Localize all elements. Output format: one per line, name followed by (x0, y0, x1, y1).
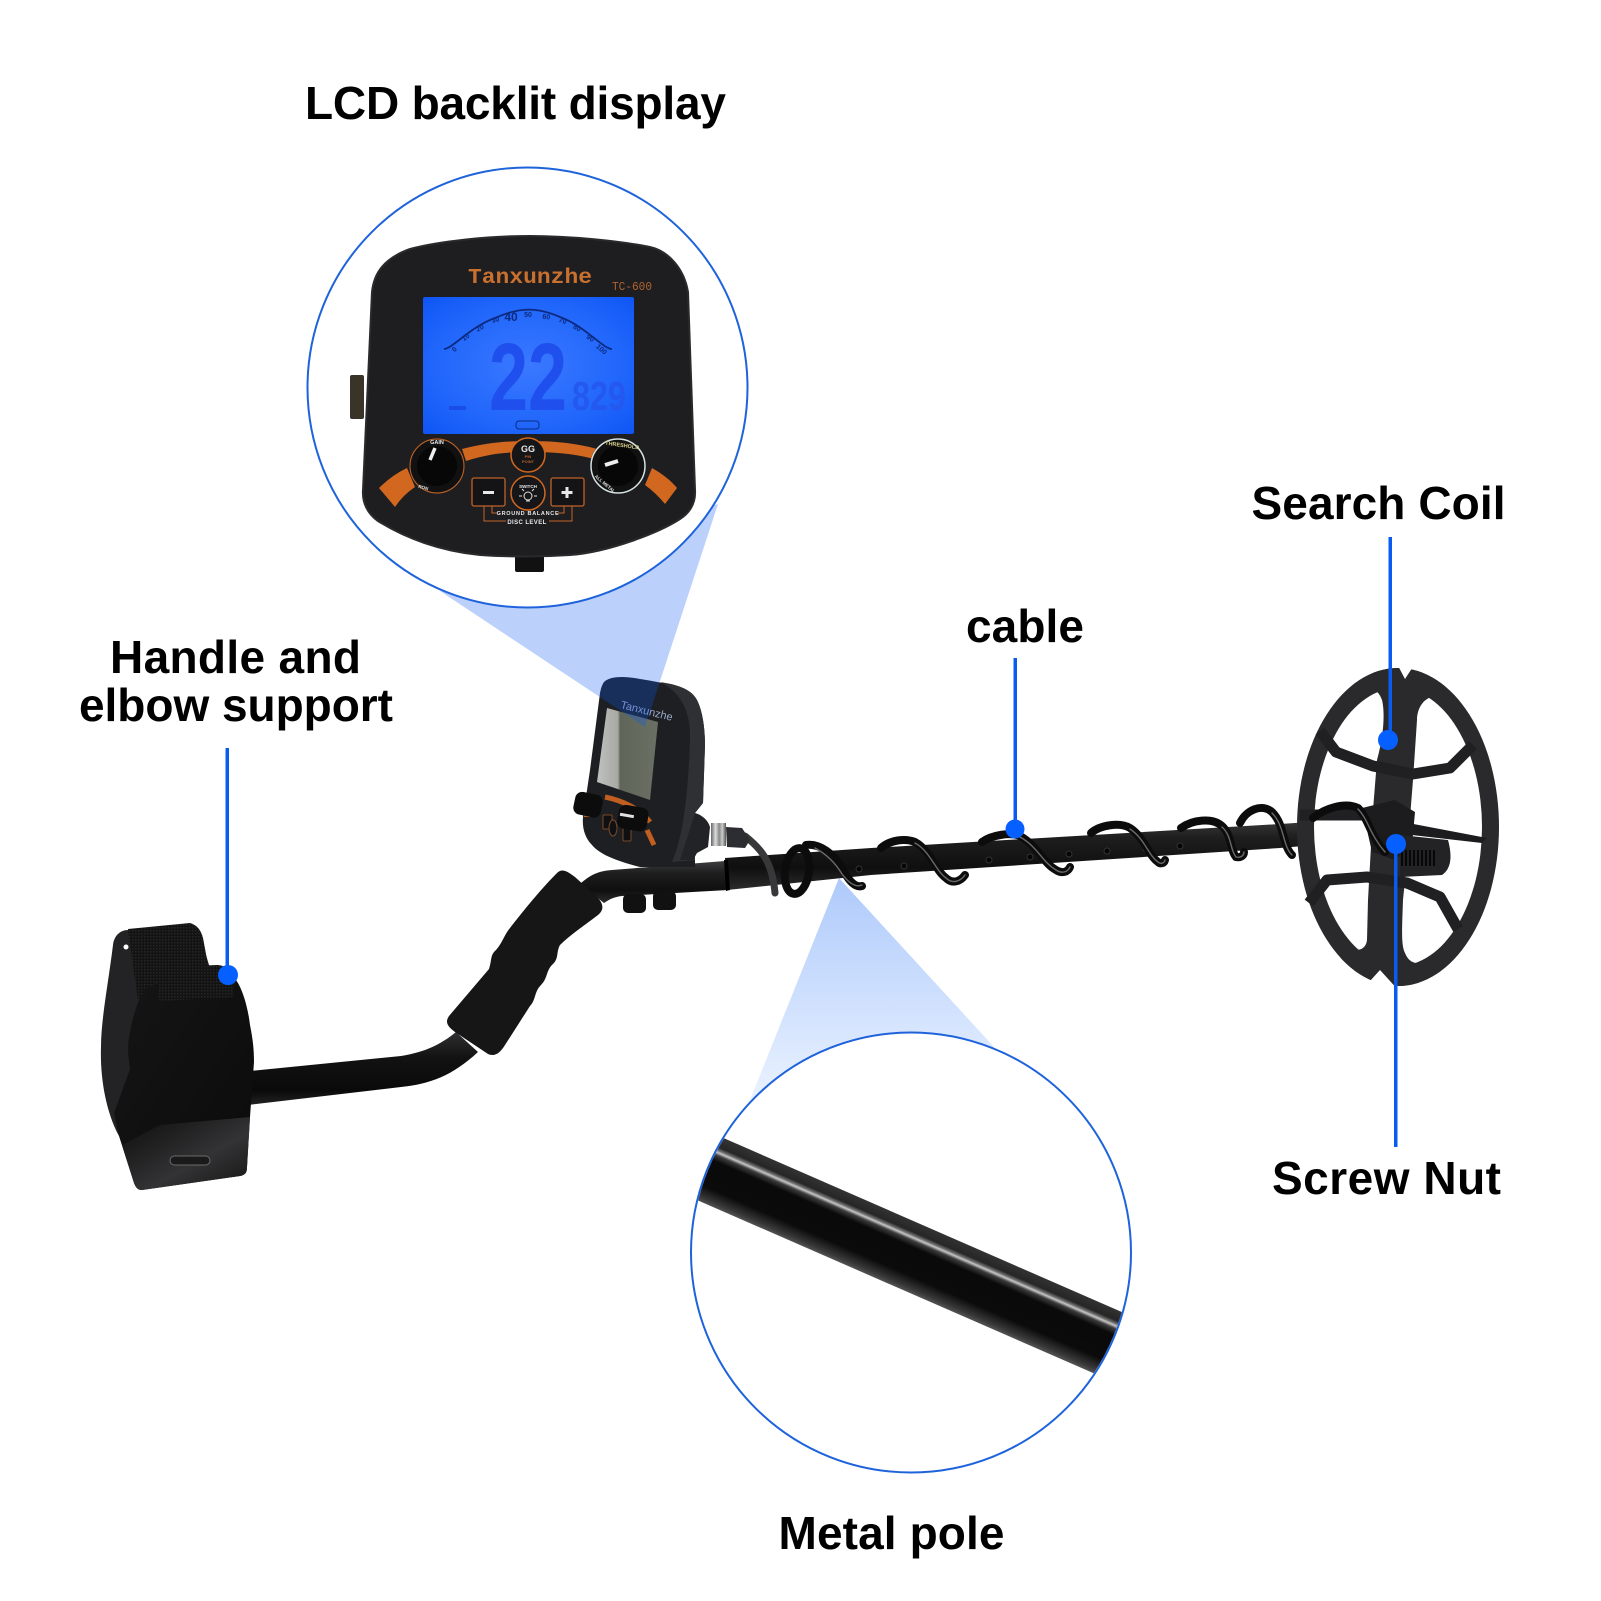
heading: Screw Nut: Screw Nut (1272, 1152, 1501, 1204)
coil opening (1314, 688, 1482, 966)
scale numbers: 90 (585, 334, 595, 344)
plate slot (170, 1156, 210, 1165)
cable socket (680, 813, 710, 860)
highlight wedge: metal pole (750, 878, 994, 1100)
pole bracket (1362, 800, 1415, 860)
model text: TC-600 (612, 280, 652, 294)
heading: Handle and elbow support: elbow support (79, 679, 393, 731)
heading: cable: cable (966, 600, 1084, 652)
ground balance label: GROUND BALANCE (497, 511, 559, 517)
main digits: 22 (489, 324, 567, 431)
THRESHOLD knob: ALL METAL (594, 474, 616, 494)
scale numbers: 80 (572, 324, 582, 334)
heading: Search Coil: Search Coil (1252, 477, 1506, 529)
scale numbers: 10 (461, 333, 471, 343)
plus button (551, 478, 584, 506)
scale numbers: 70 (558, 317, 567, 326)
coil spine (1340, 668, 1445, 986)
minus button (472, 478, 505, 506)
zoom circle: metal pole (680, 1032, 1140, 1472)
connector (711, 823, 726, 846)
callout: Screw Nut (1386, 834, 1406, 1147)
tapered right bar (1403, 822, 1487, 843)
heading: LCD backlit display: LCD backlit display (305, 77, 726, 129)
cuff base plate (122, 1117, 250, 1190)
spring housing (1400, 835, 1450, 877)
foam grip (447, 870, 602, 1055)
GG pin point button (511, 438, 545, 472)
cable wrap (745, 806, 1385, 895)
zoom circle: LCD backlit display (308, 168, 748, 608)
strap front (158, 965, 234, 1001)
strap eyelet (124, 944, 128, 950)
bottom tab (515, 555, 544, 572)
elbow cuff back shell (101, 930, 215, 1140)
connector rubber (726, 827, 750, 848)
scale numbers: 40 (504, 310, 518, 324)
scale numbers: 20 (475, 324, 485, 334)
depth scale arc (444, 310, 612, 349)
disc level label: DISC LEVEL (507, 520, 547, 526)
mount bolts (623, 891, 676, 913)
bar segment (449, 406, 466, 410)
side knob (350, 375, 364, 419)
console buttons (603, 815, 631, 841)
coil cross bars (1300, 731, 1473, 929)
GG pin point button: PIN (525, 454, 531, 459)
enlarged pole (698, 1138, 1122, 1374)
GAIN knob: GAIN (430, 440, 444, 446)
heading: Handle and elbow support (79, 631, 393, 731)
coil notches (1360, 662, 1416, 992)
highlight wedge: LCD display (440, 504, 718, 727)
metal detector product (101, 660, 1499, 1190)
scale numbers: 30 (491, 316, 500, 325)
switch button: SWITCH (519, 484, 537, 489)
console side panel (660, 682, 705, 862)
switch button (511, 476, 545, 510)
lower arm (248, 1032, 478, 1105)
callout: Search Coil (1378, 537, 1398, 750)
telescopic pole (725, 817, 1385, 890)
strap rear (128, 923, 209, 1020)
heading: Metal pole: Metal pole (778, 1507, 1004, 1559)
console screen (597, 708, 658, 800)
callout: Handle and elbow support (218, 748, 238, 985)
knobs (572, 791, 604, 819)
GG pin point button: POINT (522, 459, 535, 464)
heading: Handle and elbow support: Handle and (110, 631, 361, 683)
scale numbers: 100 (594, 343, 608, 356)
first cable run (745, 836, 775, 893)
upper curved pole section (580, 861, 728, 903)
scale numbers: 0 (451, 346, 459, 354)
orange trim (605, 797, 654, 845)
elbow cuff front shell (114, 980, 254, 1190)
LCD screen (423, 297, 634, 434)
adjustment holes (856, 843, 1183, 872)
small digits: 829 (572, 373, 626, 419)
spring (1402, 850, 1434, 866)
scale numbers: 60 (542, 314, 551, 322)
console brand: Tanxunzhe (619, 699, 674, 724)
callout: cable (1006, 658, 1024, 838)
brand text: Tanxunzhe (468, 267, 592, 290)
small console (572, 677, 750, 867)
search coil (1297, 660, 1499, 992)
console face (363, 236, 695, 556)
GAIN knob (409, 438, 465, 494)
bracket lines (484, 506, 572, 521)
GG pin point button: GG (521, 444, 535, 454)
pole joint (724, 860, 730, 891)
THRESHOLD knob (590, 438, 646, 494)
orange arcs (379, 441, 677, 507)
battery icon (516, 421, 539, 429)
scale numbers (451, 310, 608, 356)
scale numbers: 50 (524, 312, 532, 319)
THRESHOLD knob: THRESHOLD (605, 441, 640, 451)
GAIN knob: RON (418, 484, 429, 491)
